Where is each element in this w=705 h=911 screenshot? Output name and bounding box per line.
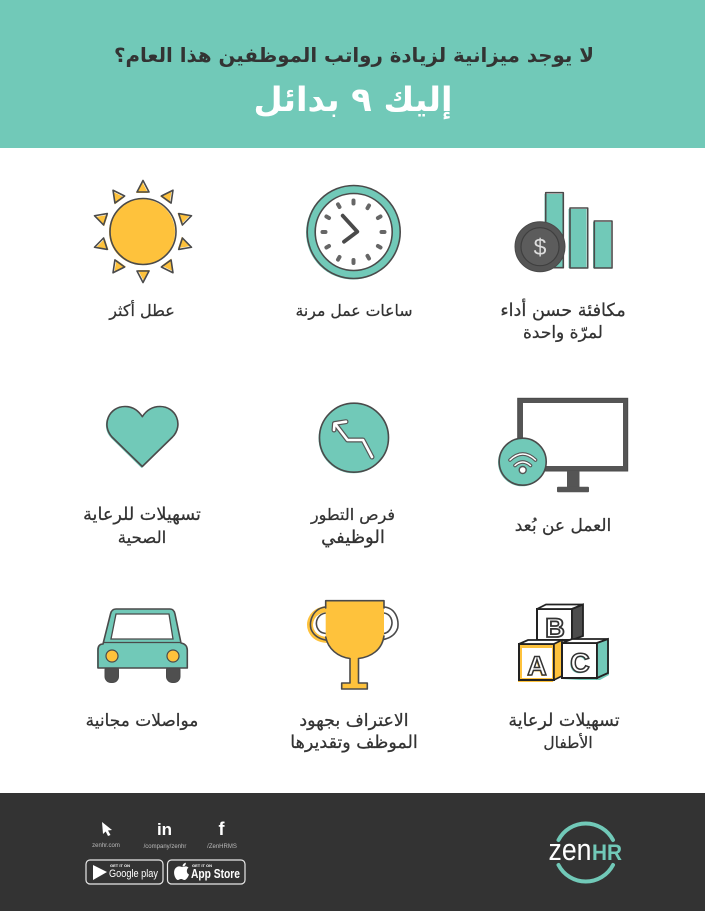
icon: growth circle — [318, 403, 388, 473]
label: one-time bonus: لمرّة واحدة — [523, 323, 603, 343]
badge: app store: GET IT ON — [192, 863, 212, 868]
label: health care: تسهيلات للرعاية — [83, 505, 201, 525]
icon: trophy — [310, 601, 398, 689]
logo: zenHR — [548, 823, 622, 882]
icon: blocks: B — [545, 613, 565, 643]
icon: heart — [106, 406, 178, 468]
label: childcare: الأطفال — [543, 733, 593, 752]
icon: clock — [306, 186, 400, 280]
badge: google play — [86, 860, 163, 884]
label: flexible hours: ساعات عمل مرنة — [296, 301, 412, 321]
badge: app store: App Store — [191, 867, 240, 881]
badge: google play: Google play — [109, 868, 158, 880]
label: free transport: مواصلات مجانية — [86, 711, 198, 731]
icon: sun — [92, 180, 194, 282]
badge: google play: GET IT ON — [110, 863, 130, 868]
icon: bar chart with coin: $ — [534, 234, 547, 260]
label: one-time bonus: مكافئة حسن أداء — [500, 298, 626, 321]
label: remote work: العمل عن بُعد — [515, 516, 611, 536]
label: recognition: الاعتراف بجهود — [299, 711, 409, 731]
heading main: إليك ٩ بدائل — [253, 80, 453, 120]
logo: zenHR: zen — [548, 832, 592, 867]
logo: zenHR: HR — [592, 840, 622, 865]
icon: car — [97, 609, 187, 682]
label: career opportunities: الوظيفي — [321, 527, 385, 548]
website link: zenhr.com — [92, 843, 120, 849]
label: one-time bonus — [500, 298, 626, 343]
linkedin link: /company/zenhr — [144, 844, 186, 850]
icon: blocks: C — [570, 648, 590, 678]
icon: blocks: A — [526, 652, 546, 682]
icon: monitor with wifi — [498, 398, 628, 492]
icon: facebook: f — [218, 819, 226, 839]
label: more holidays: عطل أكثر — [108, 300, 175, 321]
icon: blocks — [518, 604, 609, 682]
icon: cursor — [102, 822, 112, 836]
header band — [0, 0, 705, 148]
label: childcare — [508, 711, 620, 752]
label: career opportunities: فرص التطور — [310, 505, 395, 525]
footer band — [0, 793, 705, 911]
badge: app store — [168, 860, 245, 884]
facebook link: /ZenHRMS — [207, 844, 237, 850]
heading question: لا يوجد ميزانية لزيادة رواتب الموظفين هذا العام؟ — [114, 44, 594, 67]
icon: linkedin: in — [157, 820, 172, 839]
label: childcare: تسهيلات لرعاية — [508, 711, 620, 731]
label: health care — [83, 505, 201, 547]
label: health care: الصحية — [118, 528, 166, 547]
label: career opportunities — [310, 505, 395, 548]
label: recognition: الموظف وتقديرها — [290, 733, 418, 753]
icon: bar chart with coin — [515, 193, 612, 272]
icon: blocks: A — [527, 651, 547, 681]
label: recognition — [290, 711, 418, 753]
icon: blocks: C — [569, 649, 589, 679]
